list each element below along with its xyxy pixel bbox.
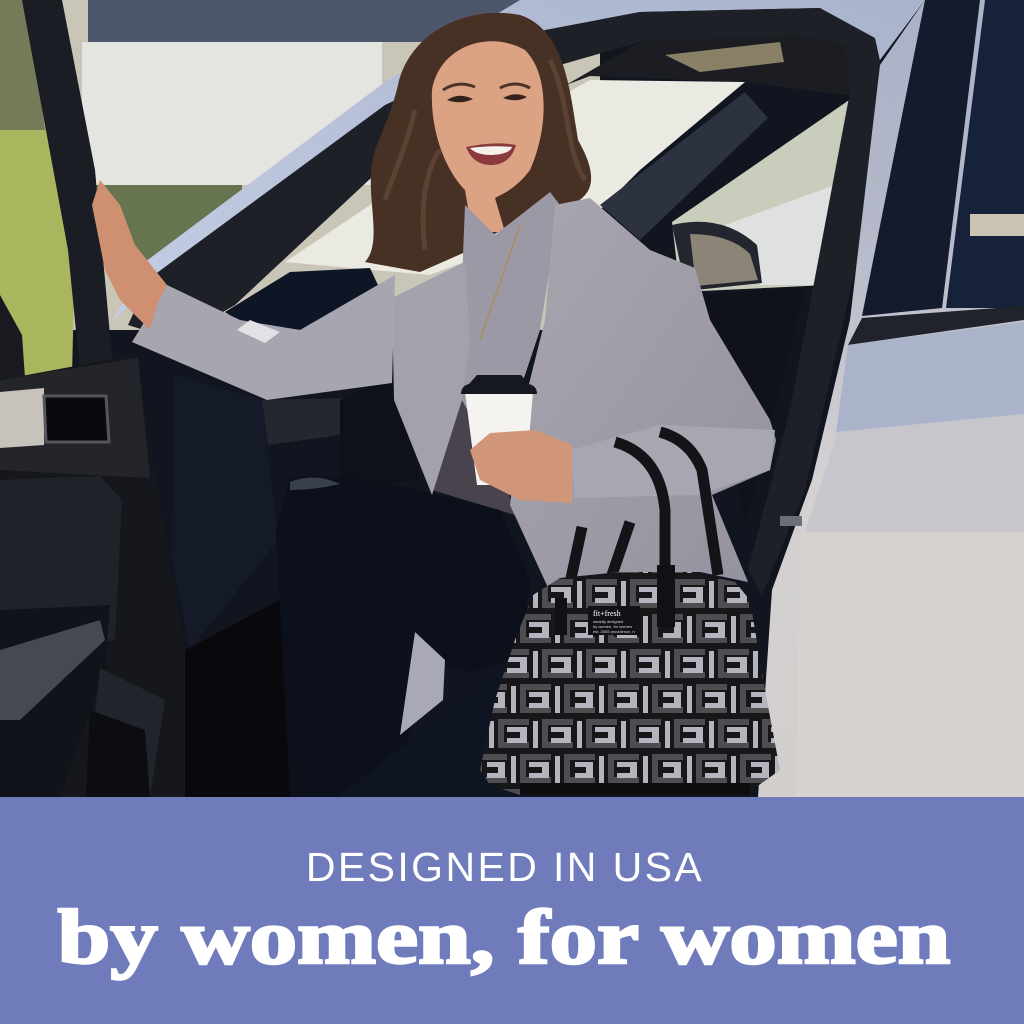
necklace <box>480 225 520 340</box>
bag label: fit+fresh <box>593 609 621 618</box>
bag handles <box>560 432 718 630</box>
woman <box>92 13 776 797</box>
turtleneck <box>460 192 560 420</box>
hair <box>365 13 591 272</box>
dark inner top <box>432 400 515 515</box>
windshield and side window <box>285 80 855 292</box>
dark door frame <box>128 8 882 595</box>
dark base of the car <box>0 0 1024 797</box>
black trousers <box>276 476 530 797</box>
background: yard and house <box>60 0 600 330</box>
raised arm sleeve <box>132 275 395 400</box>
cardigan body <box>510 198 776 592</box>
open door window with blurred trees <box>0 0 75 378</box>
bag label: smartly designed <box>593 619 623 624</box>
cardigan front <box>392 262 470 495</box>
coat hem <box>400 632 445 735</box>
door window pillar <box>22 0 113 372</box>
bag label: by women, for women <box>593 624 632 629</box>
car body: silver rear panel <box>758 0 1024 797</box>
dashboard <box>225 268 385 330</box>
trouser highlight <box>290 477 340 490</box>
bag label: est. 2005 providence, ri <box>593 629 635 634</box>
bag base strip <box>520 783 750 795</box>
banner headline: by women, for women <box>58 894 950 980</box>
banner <box>0 797 1024 1024</box>
photo: woman stepping out of a silver car <box>0 0 1024 797</box>
windshield pillar and sun visor <box>566 35 858 240</box>
face and neck <box>432 41 544 232</box>
sleeve sunlight patch <box>237 320 280 343</box>
raised hand <box>92 180 167 330</box>
banner kicker: DESIGNED IN USA <box>306 844 704 890</box>
wing mirror <box>672 222 762 291</box>
bag body <box>480 572 780 795</box>
hand on cup <box>470 430 572 503</box>
open car door <box>0 355 185 797</box>
car seat and center console <box>172 288 805 797</box>
bag label <box>588 606 640 635</box>
bag straps <box>555 565 675 635</box>
coffee cup <box>461 375 537 485</box>
handbag <box>480 432 780 795</box>
silver roof rail <box>112 0 925 322</box>
forearm sleeve <box>570 425 775 498</box>
